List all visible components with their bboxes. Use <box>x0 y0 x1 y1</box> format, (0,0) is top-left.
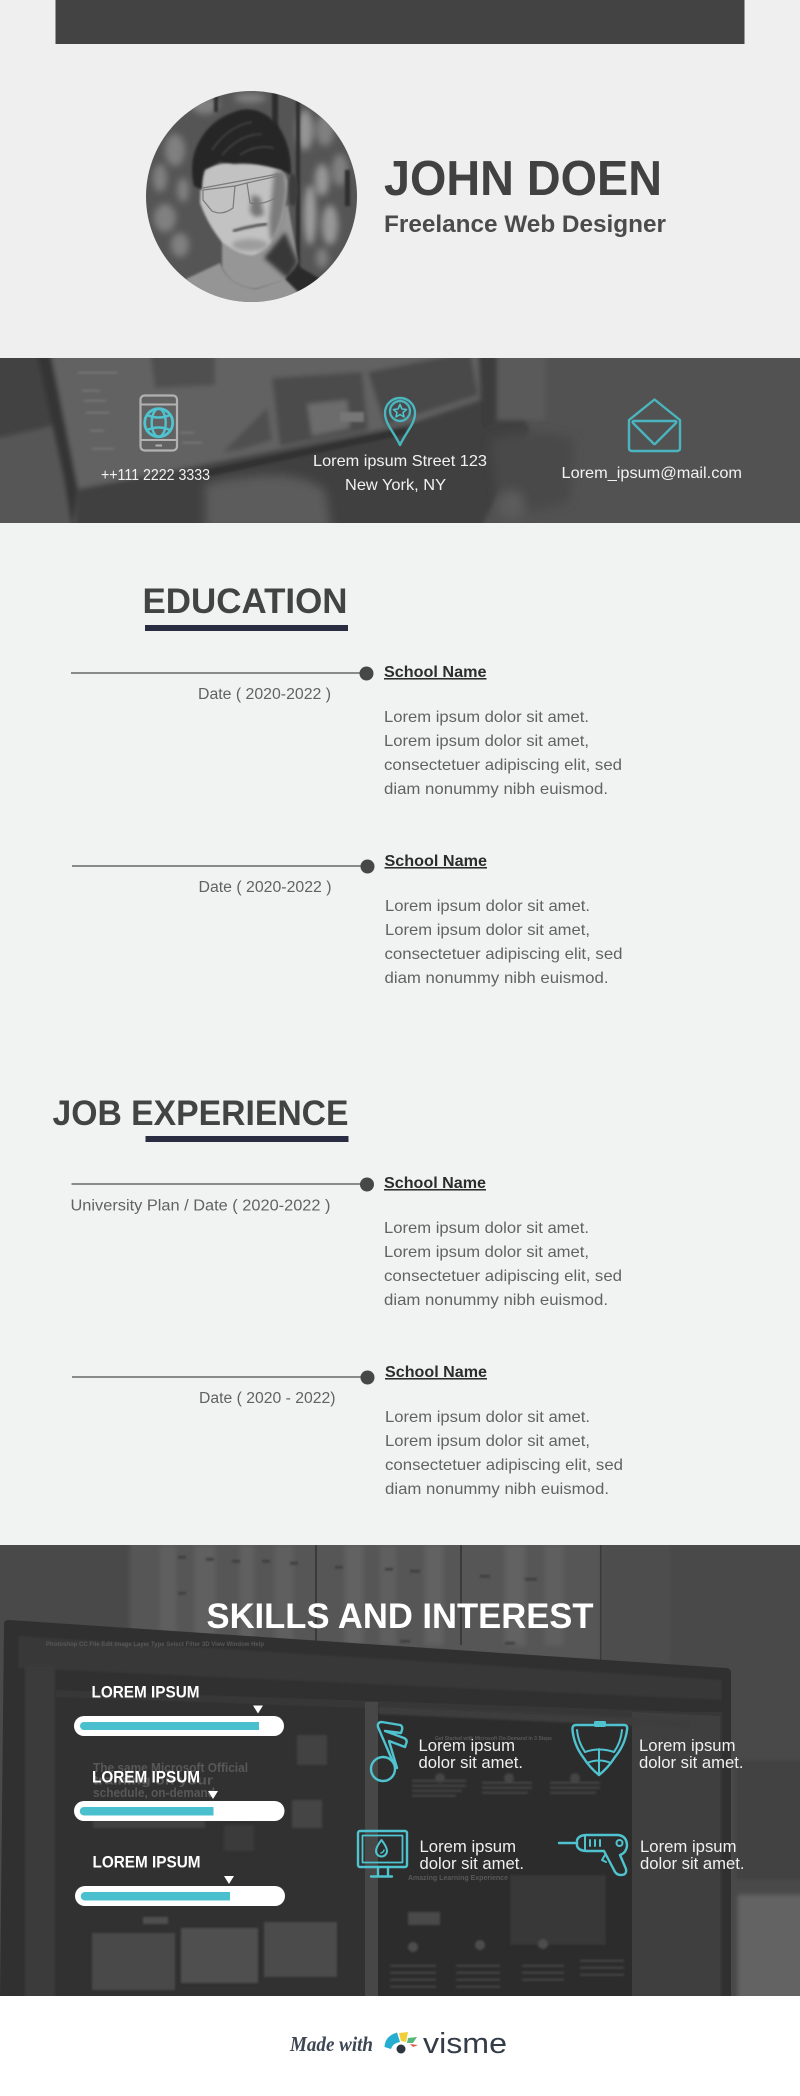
job entry 1: diam nonummy nibh euismod. <box>384 1292 608 1309</box>
interest text 2 <box>639 1736 744 1772</box>
icon: phone with globe <box>140 396 177 450</box>
icon: power drill <box>559 1835 627 1875</box>
interest text 4 <box>640 1837 744 1873</box>
screen ghost text: The same Microsoft Official <box>93 1761 248 1775</box>
hair <box>192 109 291 190</box>
monitor <box>0 1620 731 2000</box>
screen ghost text: training on your <box>93 1774 213 1788</box>
screen ghost text: Get Started with Microsoft On-Demand in 3 Steps <box>435 1736 552 1742</box>
interest text 1 <box>418 1736 523 1772</box>
screen ghost text: Photoshop CC File Edit Image Layer Type Select Filter 3D View Window Help <box>46 1642 264 1648</box>
interest text 4: Lorem ipsum <box>640 1837 736 1856</box>
nose and mouth <box>250 195 264 217</box>
heading: job experience: JOB EXPERIENCE <box>52 1094 348 1133</box>
education entry 1: Lorem ipsum dolor sit amet, <box>384 733 589 750</box>
job entry 2: Lorem ipsum dolor sit amet. <box>385 1409 590 1426</box>
education entry 2: School Name <box>384 853 487 870</box>
education entry 1: diam nonummy nibh euismod. <box>384 781 608 798</box>
skill bar 1: LOREM IPSUM <box>92 1684 200 1702</box>
education entry 2: Lorem ipsum dolor sit amet. <box>385 898 590 915</box>
screen ghost text: schedule, on-demand <box>93 1786 215 1800</box>
skill bar 2: LOREM IPSUM <box>92 1768 200 1786</box>
education entry 2: consectetuer adipiscing elit, sed <box>384 946 622 963</box>
icon: monitor with drop <box>358 1831 407 1876</box>
shirt <box>186 262 300 302</box>
skills band with monitor photo <box>0 1535 800 2005</box>
email: Lorem_ipsum@mail.com <box>562 465 742 482</box>
ear <box>288 174 298 206</box>
header background <box>0 0 800 358</box>
job subtitle: Freelance Web Designer <box>384 211 666 238</box>
job entry 1: University Plan / Date ( 2020-2022 ) <box>70 1198 330 1214</box>
interest text 2: dolor sit amet. <box>639 1753 744 1772</box>
footer: made with visme: visme <box>423 2028 507 2060</box>
skill bar 3: LOREM IPSUM <box>92 1854 200 1872</box>
icon: football helmet mask <box>572 1721 627 1775</box>
education entry 1: consectetuer adipiscing elit, sed <box>384 757 622 774</box>
footer: made with visme <box>289 2028 507 2060</box>
job entry 2: Date ( 2020 - 2022) <box>199 1390 336 1407</box>
icon: location pin <box>385 398 415 445</box>
interest text 3: Lorem ipsum <box>420 1837 516 1856</box>
education entry 2 <box>72 853 622 987</box>
address: New York, NY <box>345 477 446 494</box>
skill bar 2 <box>74 1768 284 1821</box>
face <box>200 160 287 255</box>
education entry 2: Date ( 2020-2022 ) <box>198 879 332 896</box>
skill bar 1 <box>74 1684 284 1736</box>
address: Lorem ipsum Street 123 <box>313 453 487 470</box>
education entry 1: School Name <box>384 664 487 681</box>
screen ghost text <box>46 1642 552 1882</box>
education entry 2: diam nonummy nibh euismod. <box>384 970 608 987</box>
job entry 2: diam nonummy nibh euismod. <box>385 1481 609 1498</box>
job entry 1: Lorem ipsum dolor sit amet. <box>384 1220 589 1237</box>
footer: made with visme: Made with <box>289 2032 373 2056</box>
neck <box>222 205 298 289</box>
job entry 2: School Name <box>385 1364 487 1381</box>
skill bar 3 <box>75 1854 285 1906</box>
interest text 4: dolor sit amet. <box>640 1854 744 1873</box>
address <box>313 453 487 494</box>
screen ghost text: Amazing Learning Experience <box>408 1875 508 1882</box>
contact band with laptop photo <box>0 350 800 530</box>
interest text 3 <box>420 1837 524 1873</box>
main section background <box>0 523 800 1545</box>
job entry 1: School Name <box>384 1175 486 1192</box>
name title: JOHN DOEN <box>384 152 662 206</box>
job entry 1: Lorem ipsum dolor sit amet, <box>384 1244 589 1261</box>
job entry 2 <box>72 1364 623 1498</box>
heading: education: EDUCATION <box>142 582 348 621</box>
icon: music note <box>371 1722 407 1781</box>
glasses <box>203 174 278 213</box>
interest text 2: Lorem ipsum <box>639 1736 736 1755</box>
interest text 1: Lorem ipsum <box>418 1736 515 1755</box>
education entry 1: Date ( 2020-2022 ) <box>198 686 331 703</box>
top dark bar <box>56 0 744 44</box>
heading: skills and interest: SKILLS AND INTEREST <box>206 1597 594 1636</box>
phone number: ++111 2222 3333 <box>101 467 210 484</box>
job entry 1: consectetuer adipiscing elit, sed <box>384 1268 622 1285</box>
portrait photo <box>146 91 357 302</box>
interest text 1: dolor sit amet. <box>418 1753 523 1772</box>
job entry 2: Lorem ipsum dolor sit amet, <box>385 1433 590 1450</box>
job entry 1 <box>70 1175 622 1309</box>
education entry 1: Lorem ipsum dolor sit amet. <box>384 709 589 726</box>
icon: open envelope <box>629 400 680 451</box>
interest text 3: dolor sit amet. <box>420 1854 524 1873</box>
education entry 2: Lorem ipsum dolor sit amet, <box>385 922 590 939</box>
job entry 2: consectetuer adipiscing elit, sed <box>385 1457 623 1474</box>
education entry 1 <box>71 664 622 798</box>
